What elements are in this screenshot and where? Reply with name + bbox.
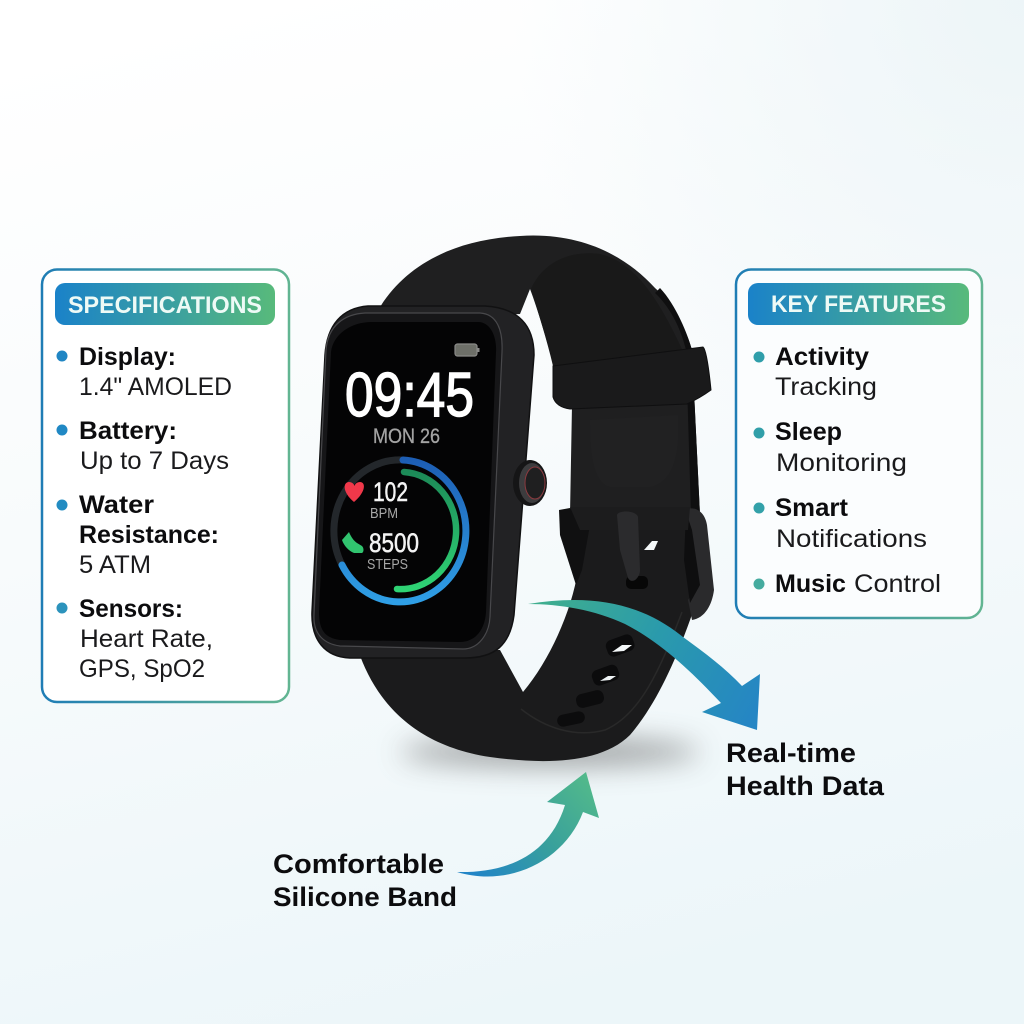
spec: display <box>56 343 232 401</box>
icon: battery <box>455 344 480 356</box>
icon: shoe <box>342 532 364 553</box>
heading: specifications: SPECIFICATIONS <box>68 292 262 319</box>
feature: music control: Control <box>854 570 941 598</box>
label: real-time health data: Real-time <box>726 738 856 768</box>
feature: smart notifications: Smart <box>775 494 849 522</box>
arrow: from silicone band <box>457 772 599 877</box>
watch case <box>312 306 534 658</box>
heading: specifications <box>55 283 275 325</box>
spec: battery: Battery: <box>79 417 177 445</box>
label: comfortable silicone band: Comfortable <box>273 849 444 879</box>
feature: smart notifications <box>754 494 927 553</box>
panel: key features <box>736 270 982 618</box>
spec: display: 1.4" AMOLED <box>79 373 232 401</box>
spec: water resistance: Water <box>79 491 154 519</box>
feature: activity tracking: Activity <box>775 343 869 371</box>
spec: sensors <box>56 595 213 683</box>
date: MON 26 <box>373 425 440 448</box>
icon: heart <box>345 482 364 502</box>
band holes <box>556 541 658 728</box>
lower strap <box>358 515 697 761</box>
spec: sensors: Heart Rate, <box>80 625 213 653</box>
label: real-time health data: Health Data <box>726 771 885 801</box>
label: real-time health data <box>726 738 885 801</box>
feature: sleep monitoring: Monitoring <box>776 449 907 477</box>
feature: sleep monitoring <box>754 418 907 477</box>
progress rings <box>334 460 466 602</box>
spec: water resistance: 5 ATM <box>79 551 151 579</box>
feature: music control: Music <box>775 570 846 598</box>
feature: activity tracking: Tracking <box>775 373 877 401</box>
watch screen <box>314 313 502 649</box>
crown button <box>513 460 547 506</box>
heading: key features <box>748 283 969 325</box>
time: 09:45 <box>345 361 474 430</box>
upper strap <box>372 236 700 515</box>
heart rate value: 102 <box>373 477 408 507</box>
label: comfortable silicone band <box>273 849 457 912</box>
feature: music control <box>754 570 941 598</box>
shadow under band <box>400 738 700 766</box>
feature: sleep monitoring: Sleep <box>775 418 842 446</box>
heading: key features: KEY FEATURES <box>771 291 946 318</box>
smartwatch <box>312 236 714 766</box>
label: comfortable silicone band: Silicone Band <box>273 882 457 912</box>
spec: water resistance <box>56 491 219 579</box>
heart rate unit: BPM <box>370 505 398 522</box>
arrow: to real-time health data <box>528 600 760 730</box>
spec: display: Display: <box>79 343 176 371</box>
steps unit: STEPS <box>367 556 408 573</box>
buckle <box>559 507 714 620</box>
spec: water resistance: Resistance: <box>79 521 219 549</box>
feature: smart notifications: Notifications <box>776 525 927 553</box>
spec: battery <box>56 417 229 475</box>
keeper loop <box>553 347 711 409</box>
panel: specifications <box>42 270 289 702</box>
spec: sensors: Sensors: <box>79 595 183 623</box>
steps value: 8500 <box>369 528 419 558</box>
spec: sensors: GPS, SpO2 <box>79 655 205 683</box>
feature: activity tracking <box>754 343 877 401</box>
spec: battery: Up to 7 Days <box>80 447 229 475</box>
